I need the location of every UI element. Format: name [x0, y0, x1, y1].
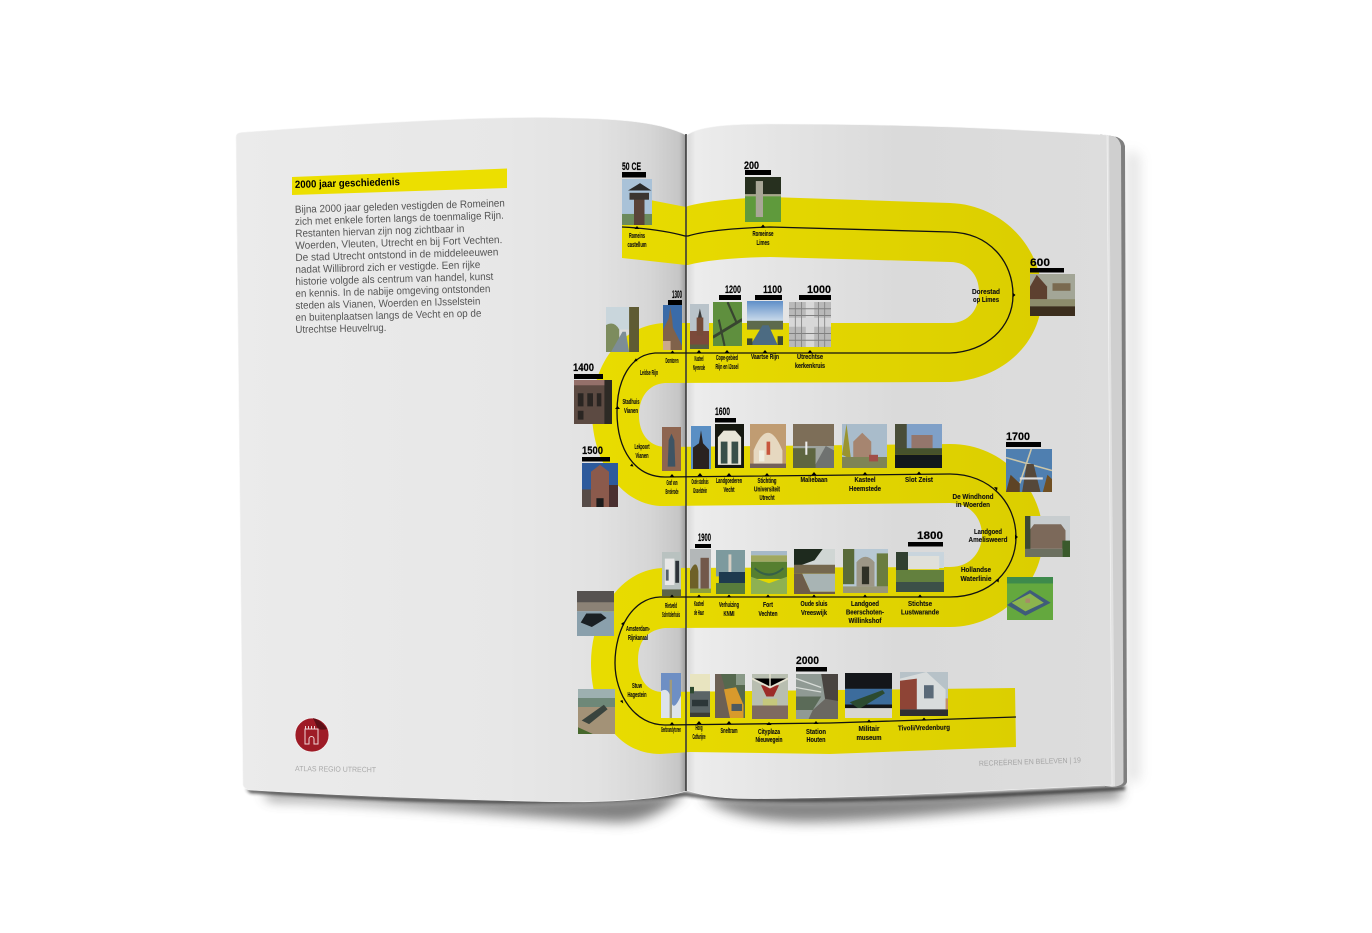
milestone: Cityplaza Nieuwegein: Nieuwegein [756, 737, 782, 744]
milestone: Cityplaza Nieuwegein [752, 674, 788, 744]
milestone: 50 CE [622, 161, 652, 249]
milestone: 1500 Lekpoort Vianen: Lekpoort [634, 444, 650, 451]
milestone: 600: Dorestad [972, 289, 1000, 296]
milestone: 2000 Station Houten: Station [806, 729, 826, 736]
milestone: Landgoed Beerschoten-Willinkshof: Landgoed [851, 601, 879, 608]
milestone: 1400 Stadhuis Vianen: Stadhuis [622, 399, 640, 406]
milestone: Stuw Hagestein: Stuw [632, 683, 642, 690]
text: Domtoren [666, 358, 678, 365]
milestone: 1500 Lekpoort Vianen: 1500 [582, 445, 603, 457]
milestone: 50 CE: castellum [628, 242, 646, 249]
book shadow [246, 150, 1140, 822]
milestone: 1900 Kasteel de Haar: 1900 [698, 532, 711, 544]
milestone: Hoog Catharijne [690, 674, 710, 741]
milestone: Kasteel Heemstede: Kasteel [854, 477, 876, 484]
milestone: 1200: Rijn en IJssel [716, 364, 739, 371]
milestone: Gerbrandytoren [661, 673, 681, 734]
milestone: Maliebaan: Maliebaan [800, 477, 828, 484]
milestone: 600 [972, 257, 1075, 316]
left page [236, 117, 686, 802]
milestone: 1800 Stichtse Lustwarande: Stichtse [908, 601, 932, 608]
milestone: Militair museum [845, 673, 892, 742]
milestone: Sneltram: Sneltram [720, 728, 738, 735]
intro text block: historie volgde als centrum van handel, kunst [295, 271, 494, 288]
milestone: TivoliVredenburg [898, 672, 950, 732]
text: Brederode [666, 489, 679, 496]
milestone: 200: Limes [756, 240, 770, 247]
milestone: Graf van Brederode [662, 427, 681, 496]
milestone: 1300 Domtoren [663, 289, 682, 365]
text: Schröderhuis [662, 612, 680, 619]
intro text block: Restanten hiervan zijn nog zichtbaar in [295, 223, 465, 240]
milestone: 1700 De Windhond in Woerden: in Woerden [956, 502, 990, 509]
milestone: 1700 De Windhond in Woerden: De Windhond [952, 494, 994, 501]
milestone: 1700 De Windhond in Woerden [952, 431, 1052, 509]
milestone: 1400 Stadhuis Vianen: 1400 [573, 362, 594, 374]
text: 1300 [672, 289, 682, 301]
milestone: Stuw Hagestein [578, 683, 646, 734]
text: Oude stadhuis [692, 479, 709, 486]
milestone: Rietveld Schröderhuis [662, 552, 681, 619]
milestone: 50 CE: 50 CE [622, 161, 641, 173]
milestone: Oude stadhuis IJsselstein [691, 426, 711, 495]
milestone: Oude stadhuis IJsselstein: IJsselstein [693, 488, 707, 495]
milestone: Landgoed Amelisweerd: Landgoed [974, 529, 1002, 536]
milestone: Stuw Hagestein: Hagestein [628, 692, 646, 699]
milestone: 2000 Station Houten: 2000 [796, 655, 819, 667]
milestone: 1400 Stadhuis Vianen: Vianen [624, 408, 638, 415]
milestone: Oude sluis Vreeswijk: Oude sluis [800, 601, 828, 608]
intro text block: en kennis. In de nabije omgeving ontstonden [295, 283, 491, 300]
page stack on right edge [1100, 134, 1127, 788]
milestone: Amsterdam-Rijnkanaal: Rijnkanaal [628, 635, 648, 642]
milestone: Landgoed Beerschoten-Willinkshof [843, 549, 888, 625]
milestone: 2000 Station Houten: Houten [806, 737, 826, 744]
right footer: RECREËREN EN BELEVEN | 19 [979, 755, 1081, 768]
milestone: 1100: Vaartse Rijn [751, 354, 779, 361]
milestone: 50 CE: Romeins [629, 233, 645, 240]
timeline line [615, 227, 1016, 725]
milestone: 1800 Stichtse Lustwarande: Lustwarande [901, 610, 939, 616]
text: Leidse Rijn [640, 370, 658, 377]
intro text block: nadat Willibrord zich er vestigde. Een rijke [295, 259, 481, 276]
milestone: 600: 600 [1030, 257, 1050, 269]
milestone: Oude sluis Vreeswijk: Vreeswijk [801, 610, 827, 617]
milestone: Landgoed Beerschoten-Willinkshof: Willinkshof [848, 618, 882, 625]
milestone: Slot Zeist: Slot Zeist [905, 477, 934, 484]
milestone: 1600 Landgoederen Vecht [715, 406, 744, 494]
text: Nyenrode [693, 365, 705, 372]
milestone: Stichting Universiteit Utrecht [750, 424, 786, 502]
milestone: Hollandse Waterlinie: Waterlinie [960, 576, 992, 583]
milestone: Verhuizing KNMI [716, 550, 745, 618]
milestone: 1900 Kasteel de Haar [690, 532, 711, 617]
milestone: Hoog Catharijne: Hoog [696, 725, 702, 732]
intro text block: en buitenplaatsen langs de Vecht en op de [295, 308, 482, 324]
milestone: Stichting Universiteit Utrecht: Stichting [758, 478, 776, 485]
milestone: 1700 De Windhond in Woerden: 1700 [1006, 431, 1030, 443]
milestone: Landgoed Beerschoten-Willinkshof: Beerschoten- [846, 610, 885, 616]
milestone: Rietveld Schröderhuis: Rietveld [665, 603, 677, 610]
milestone: TivoliVredenburg: Tivoli/Vredenburg [898, 725, 950, 732]
milestone: 1500 Lekpoort Vianen [582, 444, 650, 507]
milestone: 1600 Landgoederen Vecht: 1600 [715, 406, 730, 418]
milestone: Hollandse Waterlinie [960, 567, 1053, 620]
left footer: ATLAS REGIO UTRECHT [295, 764, 376, 774]
text: Gerbrandytoren [661, 727, 681, 734]
milestone: 1200 [713, 284, 742, 371]
left page heading [292, 168, 507, 195]
milestone: Maliebaan [793, 424, 834, 484]
intro text block: Woerden, Vleuten, Utrecht en bij Fort Vechten. [295, 234, 503, 252]
milestone: 1000: Utrechtse [797, 354, 823, 361]
milestone: Militair museum: museum [856, 735, 882, 742]
milestone: Amsterdam-Rijnkanaal: Amsterdam- [626, 626, 650, 633]
milestone: Amsterdam-Rijnkanaal [577, 591, 650, 642]
milestone: 1500 Lekpoort Vianen: Vianen [636, 453, 648, 460]
milestone: 1600 Landgoederen Vecht: Vecht [724, 487, 735, 494]
milestone: Kasteel Nyenrode: Kasteel [694, 356, 704, 363]
milestone: Kasteel Nyenrode [690, 304, 709, 372]
milestone: Kasteel Heemstede [842, 424, 887, 493]
milestone: Sneltram [715, 674, 745, 735]
milestone: Oude sluis Vreeswijk [794, 549, 835, 617]
milestone: 1200: Cope-gebied [716, 355, 738, 362]
milestone: Hollandse Waterlinie: Hollandse [961, 567, 991, 574]
right page [687, 124, 1112, 799]
milestone: 1600 Landgoederen Vecht: Landgoederen [716, 478, 742, 485]
milestone: Landgoed Amelisweerd [968, 516, 1070, 557]
intro text block [295, 197, 505, 336]
intro text block: Bijna 2000 jaar geleden vestigden de Romeinen [295, 197, 505, 216]
milestone: Hoog Catharijne: Catharijne [692, 734, 706, 741]
icon: red sticker with castle [295, 718, 329, 752]
intro text block: Utrechtse Heuvelrug. [295, 322, 387, 336]
intro text block: steden als Vianen, Woerden en IJsselstein [295, 295, 481, 312]
milestone: Kasteel Heemstede: Heemstede [849, 486, 881, 493]
milestone: 1400 Stadhuis Vianen [573, 362, 640, 424]
milestone: Fort Vechten: Fort [763, 602, 773, 609]
milestone: Verhuizing KNMI: Verhuizing [719, 602, 739, 609]
milestone: 2000 Station Houten [796, 655, 838, 744]
milestone: Landgoed Amelisweerd: Amelisweerd [968, 537, 1008, 544]
milestone: Cityplaza Nieuwegein: Cityplaza [758, 729, 780, 736]
milestone: 200: 200 [744, 160, 759, 172]
intro text block: De stad Utrecht ontstond in de middeleeuwen [295, 246, 499, 264]
milestone: 1100: 1100 [763, 284, 782, 296]
milestone: 600: op Limes [973, 297, 999, 304]
milestone: 1900 Kasteel de Haar: de Haar [694, 610, 704, 617]
milestone: 1900 Kasteel de Haar: Kasteel [694, 601, 704, 608]
spine [685, 134, 687, 791]
milestone: Graf van Brederode: Graf van [666, 480, 678, 487]
milestone: Fort Vechten [751, 551, 787, 618]
milestone: Slot Zeist [895, 424, 942, 484]
milestone: 1000 [789, 284, 831, 370]
milestone: Stichting Universiteit Utrecht: Utrecht [760, 495, 775, 502]
milestone: 1200: 1200 [725, 284, 741, 296]
left page heading: 2000 jaar geschiedenis [295, 176, 400, 191]
milestone: Leidse Rijn [606, 307, 658, 377]
milestone: 1800 Stichtse Lustwarande [896, 530, 944, 616]
intro text block: zich met enkele forten langs de toenmalige Rijn. [295, 210, 504, 228]
milestone: Verhuizing KNMI: KNMI [724, 611, 735, 618]
milestone: Fort Vechten: Vechten [758, 611, 778, 618]
milestone: 1000: 1000 [807, 284, 831, 296]
milestone: 1100 [747, 284, 783, 361]
milestone: 1000: kerkenkruis [795, 363, 825, 370]
milestone: 200 [744, 160, 781, 247]
milestone: Stichting Universiteit Utrecht: Universiteit [754, 486, 780, 494]
yellow timeline band [591, 197, 1043, 754]
milestone: Militair museum: Militair [858, 726, 880, 733]
milestone: 1800 Stichtse Lustwarande: 1800 [917, 530, 943, 542]
milestone: 200: Romeinse [752, 231, 774, 238]
